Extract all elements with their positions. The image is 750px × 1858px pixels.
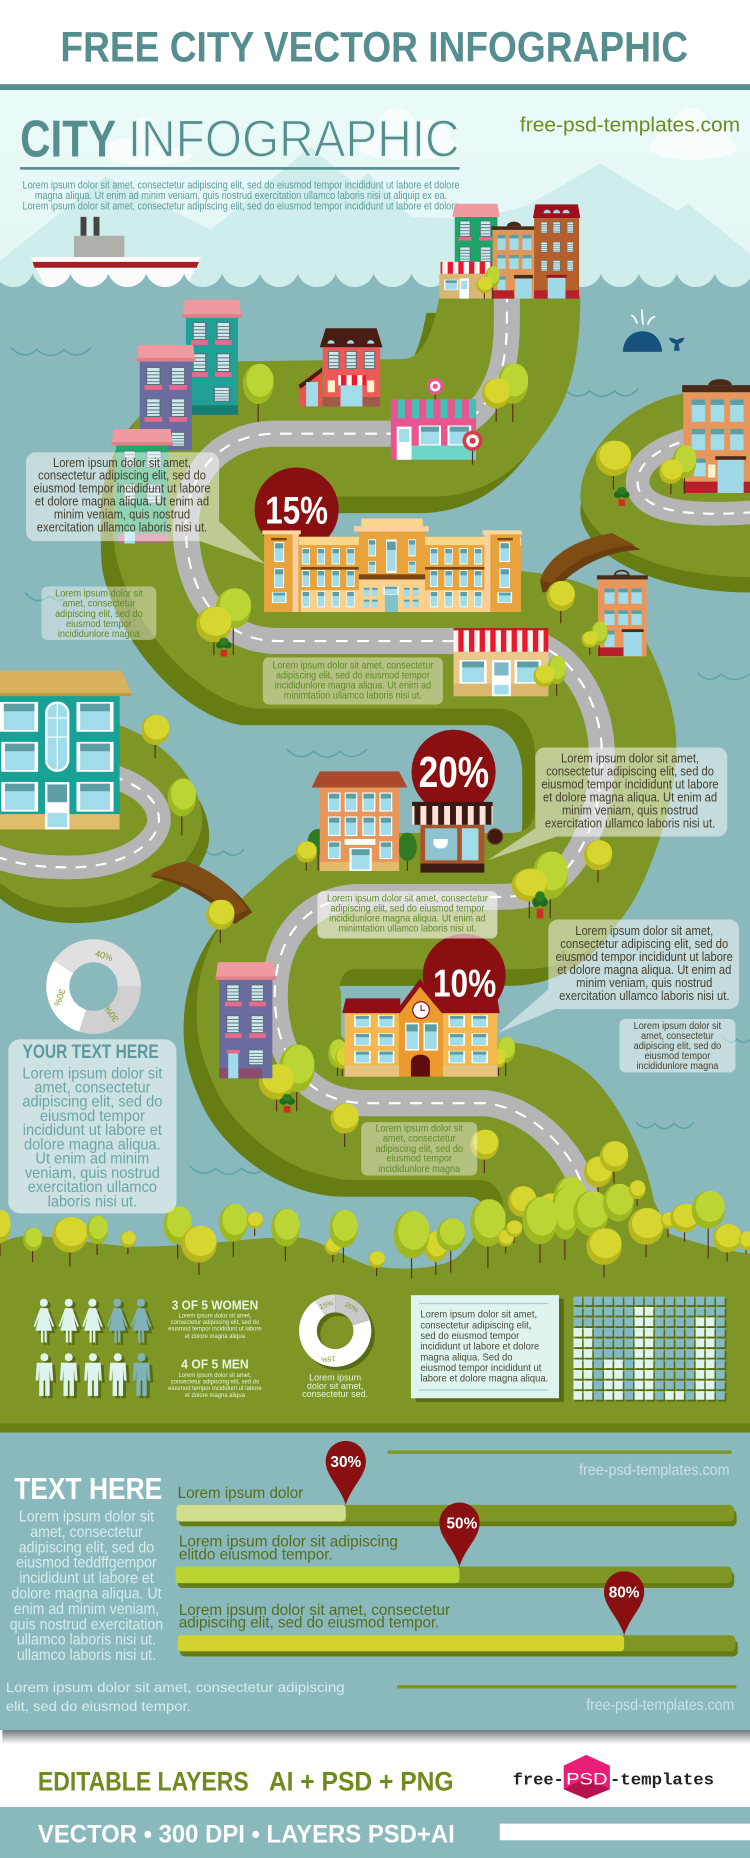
callout: 20%: exercitation ullamco laboris nisi ut.	[545, 816, 715, 831]
wave lines	[11, 347, 750, 1174]
footer band: editable layers	[38, 1765, 454, 1796]
callout: small right: Lorem ipsum dolor sit	[634, 1021, 721, 1032]
logo: PSD	[566, 1770, 608, 1789]
panel: your text here: eiusmod tempor	[40, 1107, 145, 1125]
building: candy shop	[391, 378, 483, 464]
city infographic heading: CITY	[20, 110, 116, 168]
intro text: magna aliqua. Ut enim ad minim veniam, quis nostrud exercitation ullamco laboris nisi ut aliquip ex ea.	[35, 190, 447, 202]
panel: your text here: veniam, quis nostrud	[25, 1164, 160, 1182]
callout: 10%: eiusmod tempor incididunt ut labore	[556, 949, 733, 964]
section shadow	[2, 1730, 750, 1744]
progress bar: 50%: elitdo eiusmod tempor.	[179, 1546, 333, 1563]
callout: small right: adipiscing elit, sed do	[634, 1041, 721, 1052]
donut chart: left: 30%	[52, 988, 67, 1008]
note card: sed do eiusmod tempor	[420, 1331, 520, 1342]
callout: 10%: minim veniam, quis nostrud	[576, 975, 712, 990]
text here block: enim ad minim veniam,	[14, 1601, 159, 1618]
building: awning shop top	[439, 262, 491, 299]
text here block: incididunt ut labore et	[19, 1571, 154, 1587]
callout: small left: adipiscing elit, sed do	[55, 608, 143, 620]
footer band: vector	[0, 1807, 750, 1858]
callout: 15%: minim veniam, quis nostrud	[54, 507, 190, 522]
badge label: 10%: 10%	[433, 963, 496, 1006]
callout: lower road: adipiscing elit, sed do	[375, 1143, 463, 1155]
building: purple lower	[216, 962, 276, 1078]
donut chart: left	[46, 939, 141, 1034]
building: left teal	[0, 671, 131, 829]
footnote text: Lorem ipsum dolor sit amet, consectetur adipiscing	[6, 1679, 345, 1695]
text here block: ullamco laboris nisi ut.	[17, 1632, 156, 1649]
right island land	[580, 393, 750, 592]
main road	[186, 290, 602, 1203]
city infographic heading: INFOGRAPHIC	[128, 110, 459, 168]
whale	[623, 309, 685, 352]
website line top	[387, 1450, 732, 1479]
stat text: men: consectetur adipiscing elit, sed do	[171, 1379, 260, 1385]
people pictograms	[34, 1299, 154, 1398]
stat text: women: et dolore magna aliqua	[185, 1334, 246, 1340]
text here block: TEXT HERE	[14, 1471, 162, 1506]
footer band: editable layers: EDITABLE LAYERS	[38, 1765, 249, 1796]
callout: 20%: minim veniam, quis nostrud	[562, 803, 698, 818]
donut caption: dolor sit amet,	[307, 1381, 363, 1391]
callout: 15%: Lorem ipsum dolor sit amet,	[53, 455, 191, 470]
callout: 15%	[26, 452, 265, 564]
callout: 15%: exercitation ullamco laboris nisi ut.	[37, 520, 207, 535]
note card: labore et dolore magna aliqua.	[420, 1373, 548, 1385]
donut chart: left: 30%	[102, 1004, 121, 1024]
callout: 20%: eiusmod tempor incididunt ut labore	[541, 777, 719, 792]
intro text: Lorem ipsum dolor sit amet, consectetur adipiscing elit, sed do eiusmod tempor incididunt ut labore et dolore	[23, 201, 459, 213]
progress bar: 80%: adipiscing elit, sed do eiusmod tempor.	[179, 1615, 439, 1632]
logo: free-	[513, 1771, 564, 1790]
footer band: editable layers: AI + PSD + PNG	[269, 1765, 454, 1796]
note card: consectetur adipiscing elit,	[420, 1320, 531, 1331]
stat text: women	[168, 1297, 262, 1340]
callout: 15%: et dolore magna aliqua. Ut enim ad	[35, 494, 209, 509]
progress bar: 80%: Lorem ipsum dolor sit amet, consectetur	[179, 1602, 450, 1619]
text here block: eiusmod teddffgempor	[16, 1555, 157, 1572]
callout: mid upper: minimtation ullamco laboris nisi ut.	[284, 690, 422, 702]
building: right small	[597, 571, 648, 656]
stat text: women: Lorem ipsum dolor sit amet,	[179, 1314, 252, 1320]
note card: eiusmod tempor incididunt ut	[420, 1363, 542, 1374]
water with scalloped edge	[0, 274, 750, 1440]
stat text: men: et dolore magna aliqua	[185, 1393, 246, 1399]
panel: your text here: YOUR TEXT HERE	[23, 1042, 159, 1063]
text here block: adipiscing elit, sed do	[19, 1540, 154, 1556]
donut caption: consectetur sed.	[302, 1389, 368, 1399]
mountains	[0, 147, 750, 291]
stat text: men: Lorem ipsum dolor sit amet,	[179, 1373, 252, 1379]
building: 15% palace with badge	[255, 467, 522, 612]
website label top: free-psd-templates.com	[520, 115, 740, 137]
callout: 20%: Lorem ipsum dolor sit amet,	[561, 751, 699, 766]
donut chart: ground: 15%	[320, 1354, 336, 1363]
ship	[31, 217, 201, 291]
callout: 15%: consectetur adipiscing elit, sed do	[38, 468, 206, 483]
callout: mid upper	[263, 657, 443, 704]
stat text: women: eiusmod tempor incididunt ut labore	[168, 1327, 262, 1333]
donut chart: ground	[299, 1295, 371, 1367]
panel: your text here: amet, consectetur	[34, 1079, 151, 1097]
callout: small right: incididunlore magna	[636, 1060, 719, 1072]
badge: 15% circle	[255, 467, 339, 552]
callout: small right	[619, 1019, 735, 1072]
icon: coffee sign	[487, 829, 503, 844]
left island land	[0, 711, 209, 923]
bottom ground	[0, 1203, 750, 1433]
callout: 15%: eiusmod tempor incididunt ut labore	[33, 481, 211, 496]
callout: small left: Lorem ipsum dolor sit	[55, 588, 143, 600]
clouds	[104, 108, 737, 165]
callout: mid lower: Lorem ipsum dolor sit amet, consectetur	[327, 893, 489, 905]
panel: your text here: Lorem ipsum dolor sit	[22, 1065, 163, 1082]
grid shadow	[575, 1298, 726, 1402]
panel: your text here	[8, 1039, 176, 1213]
callout: 20%	[488, 747, 727, 860]
icon: clock	[413, 1002, 429, 1018]
donut caption: Lorem ipsum	[309, 1372, 361, 1382]
note card: Lorem ipsum dolor sit amet,	[420, 1309, 537, 1321]
callout: mid lower: minimtation ullamco laboris nisi ut.	[339, 923, 476, 935]
text here block: quis nostrud exercitation	[10, 1617, 163, 1633]
callout: lower road: incididunlore magna	[378, 1164, 461, 1175]
building: purple tower	[136, 345, 195, 450]
callout: 20%: et dolore magna aliqua. Ut enim ad	[543, 790, 717, 805]
callout: small left: eiusmod tempor	[66, 618, 132, 630]
other trees	[141, 266, 696, 1173]
panel: your text here: adipiscing elit, sed do	[22, 1093, 162, 1111]
building: 20% apartment	[311, 771, 407, 871]
text here block: amet, consectetur	[30, 1524, 143, 1541]
callout: lower road	[361, 1122, 477, 1175]
callout: small left	[41, 587, 156, 640]
building: right island	[682, 379, 750, 493]
sky with clouds and mountains	[0, 90, 750, 291]
panel: your text here: exercitation ullamco	[28, 1179, 157, 1196]
bridges	[150, 533, 641, 924]
city infographic heading	[20, 110, 459, 170]
donut chart: ground: 20%	[343, 1301, 360, 1315]
building: green lower tower	[111, 429, 173, 544]
grid cells	[573, 1296, 725, 1400]
left island road	[0, 776, 159, 867]
badge: 20% circle: 20%	[419, 748, 489, 797]
logo: -templates	[610, 1771, 714, 1790]
note card: magna aliqua. Sed do	[420, 1352, 513, 1363]
building: teal tower	[182, 300, 242, 415]
right island road	[638, 437, 750, 514]
website line bottom	[397, 1685, 737, 1714]
text here block: Lorem ipsum dolor sit	[19, 1509, 154, 1526]
progress bar: 80%	[178, 1571, 738, 1657]
callout: mid upper: Lorem ipsum dolor sit amet, consectetur	[272, 660, 434, 671]
highlighted cells	[573, 1307, 714, 1400]
progress bar: 50%: 50%	[446, 1516, 477, 1533]
callout: mid lower	[317, 891, 497, 938]
badge: 10% circle	[423, 934, 506, 1017]
callout: lower road: eiusmod tempor	[386, 1153, 453, 1165]
callout: mid upper: incididunlore magna aliqua. Ut enim ad	[275, 680, 431, 692]
callout: mid lower: incididunlore magna aliqua. Ut enim ad	[329, 913, 486, 925]
website line top: free-psd-templates.com	[579, 1462, 730, 1479]
stat text: men: 4 OF 5 MEN	[181, 1357, 249, 1372]
panel: your text here: laboris nisi ut.	[48, 1193, 137, 1210]
callout: 10%: consectetur adipiscing elit, sed do	[560, 936, 729, 951]
men row	[36, 1353, 153, 1398]
pixel grid chart	[573, 1296, 726, 1402]
panel: progress section background	[0, 1433, 750, 1730]
progress bar: 30%: Lorem ipsum dolor	[178, 1485, 303, 1502]
small trees beside awning shop	[533, 656, 566, 687]
building: orange tower	[491, 222, 538, 299]
school with 10% badge	[342, 934, 506, 1077]
callout: mid lower: adipiscing elit, sed do eiusmod tempor	[330, 903, 485, 915]
callout: small left: incididunlore magna	[58, 628, 140, 640]
callout: 10%: et dolore magna aliqua. Ut enim ad	[557, 962, 731, 977]
website line bottom: free-psd-templates.com	[586, 1697, 734, 1714]
callout: lower road: Lorem ipsum dolor sit	[375, 1123, 463, 1135]
stat text: men: eiusmod tempor incididunt ut labore	[168, 1386, 262, 1392]
building: brick tower	[533, 204, 580, 299]
intro text	[23, 179, 459, 213]
progress bar: 80%: 80%	[609, 1584, 640, 1601]
panel: your text here: incididunt ut labore et	[23, 1122, 163, 1139]
foreground tree row	[0, 1141, 750, 1279]
stat text: women: 3 OF 5 WOMEN	[172, 1297, 258, 1312]
building: coffee shop	[412, 802, 503, 873]
building: red house	[298, 328, 383, 406]
callout: 20%: consectetur adipiscing elit, sed do	[546, 764, 714, 779]
callout: 10%	[499, 920, 739, 1033]
note card: incididunt ut labore et dolore	[420, 1341, 540, 1353]
footer band: vector: VECTOR • 300 DPI • LAYERS PSD+AI	[38, 1821, 455, 1849]
callout: small right: amet, consectetur	[641, 1031, 715, 1042]
progress bar: 50%: Lorem ipsum dolor sit adipiscing	[179, 1533, 398, 1550]
progress bar: 50%	[175, 1503, 734, 1588]
progress bar: 30%	[176, 1441, 737, 1526]
donut chart: left: 40%	[94, 948, 114, 963]
text here block: ullamco laboris nisi ut.	[17, 1648, 156, 1664]
building: red awning shop	[454, 628, 548, 696]
intro text: Lorem ipsum dolor sit amet, consectetur adipiscing elit, sed do eiusmod tempor incididunt ut labore et dolore	[23, 179, 459, 191]
progress bar: 30%: 30%	[330, 1454, 361, 1471]
stat text: women: consectetur adipiscing elit, sed do	[171, 1320, 260, 1326]
donut chart: ground: 15%	[318, 1299, 335, 1311]
note card	[411, 1295, 564, 1402]
callout: small left: amet, consectetur	[62, 598, 136, 610]
icon: lollipops	[427, 378, 483, 464]
callout: 10%: exercitation ullamco laboris nisi ut.	[559, 989, 729, 1003]
badge: 20% circle	[412, 730, 496, 814]
callout: 10%: Lorem ipsum dolor sit amet,	[575, 923, 713, 938]
text here block: dolore magna aliqua. Ut	[11, 1586, 162, 1603]
building: green tower	[452, 204, 500, 299]
women row	[34, 1299, 154, 1345]
panel: your text here: Ut enim ad minim	[35, 1150, 149, 1168]
callout: lower road: amet, consectetur	[383, 1133, 456, 1145]
footnote text: elit, sed do eiusmod tempor.	[6, 1698, 191, 1714]
text here block	[10, 1471, 163, 1664]
header band	[0, 0, 750, 90]
icons: potted plants	[0, 487, 630, 1113]
main winding land	[101, 296, 676, 1255]
callout: small right: eiusmod tempor	[645, 1051, 711, 1062]
panel: your text here: dolore magna aliqua.	[24, 1136, 161, 1154]
logo	[513, 1755, 714, 1799]
badge label: 15%: 15%	[265, 489, 328, 532]
stat text: men	[168, 1357, 262, 1399]
callout: mid upper: adipiscing elit, sed do eiusmod tempor	[276, 670, 431, 682]
